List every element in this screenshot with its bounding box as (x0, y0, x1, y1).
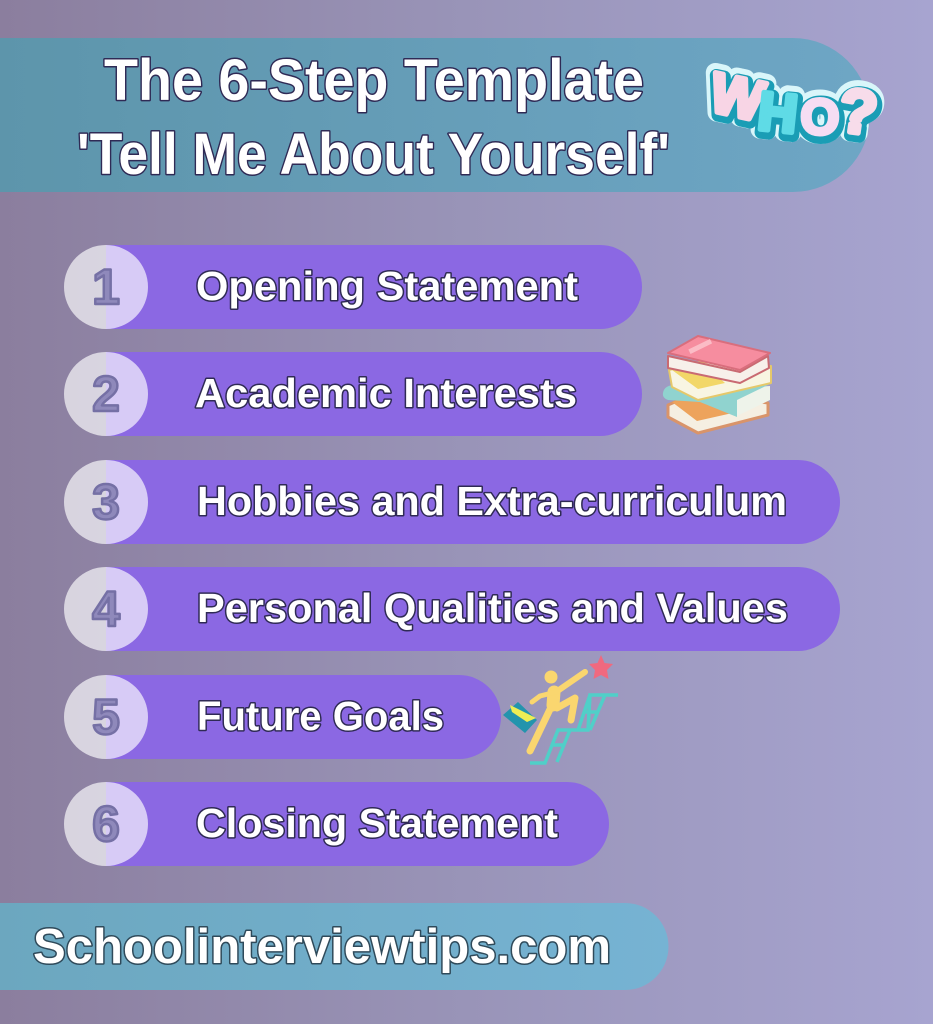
step 1 (64, 245, 642, 329)
step 2: Academic Interests (195, 370, 577, 416)
title banner (0, 38, 870, 192)
step 5: 5 (92, 689, 120, 745)
icon: WHO? sticker: W (706, 63, 771, 136)
step 4 (64, 567, 840, 651)
step 2 (64, 352, 642, 436)
icon: WHO? sticker: ? (835, 79, 882, 152)
step 6: 6 (92, 796, 120, 852)
step 4: 4 (92, 581, 120, 637)
step 4: Personal Qualities and Values (197, 585, 788, 631)
teal book (663, 384, 770, 417)
icon: WHO? sticker: W (705, 60, 770, 133)
step 3: Hobbies and Extra-curriculum (197, 478, 787, 524)
step 2: 2 (92, 366, 120, 422)
icon: WHO? sticker: H (756, 84, 801, 148)
icon: WHO? sticker: O (802, 92, 840, 148)
title: The 6-Step Template (104, 48, 644, 113)
icon: WHO? sticker: W (705, 60, 770, 133)
step 3 (64, 460, 840, 544)
step 5 (64, 675, 501, 759)
yellow book (669, 362, 771, 400)
icon: WHO? sticker: H (755, 81, 800, 145)
icon: WHO? sticker: H (755, 81, 800, 145)
icon: WHO? sticker: ? (834, 76, 881, 149)
step 6: Closing Statement (196, 800, 558, 846)
step 3: 3 (92, 474, 120, 530)
figure (530, 670, 585, 751)
icon: WHO? sticker: O (801, 89, 839, 145)
icon: WHO? sticker: ? (834, 76, 881, 149)
step 1: Opening Statement (196, 263, 578, 309)
title (77, 48, 670, 187)
step 6 (64, 782, 609, 866)
briefcase (503, 702, 537, 733)
title: 'Tell Me About Yourself' (77, 122, 670, 187)
star (589, 655, 613, 679)
icon: WHO? sticker: O (801, 89, 839, 145)
icon: stack of books (663, 336, 771, 433)
step 5: Future Goals (197, 693, 444, 739)
icon: WHO? sticker (705, 60, 882, 152)
ladder (530, 695, 618, 763)
footer banner (0, 903, 668, 990)
icon: climbing figure with briefcase (503, 655, 618, 763)
orange book (668, 392, 768, 433)
step 1: 1 (92, 259, 120, 315)
footer banner: Schoolinterviewtips.com (33, 920, 611, 974)
red book (668, 336, 770, 383)
